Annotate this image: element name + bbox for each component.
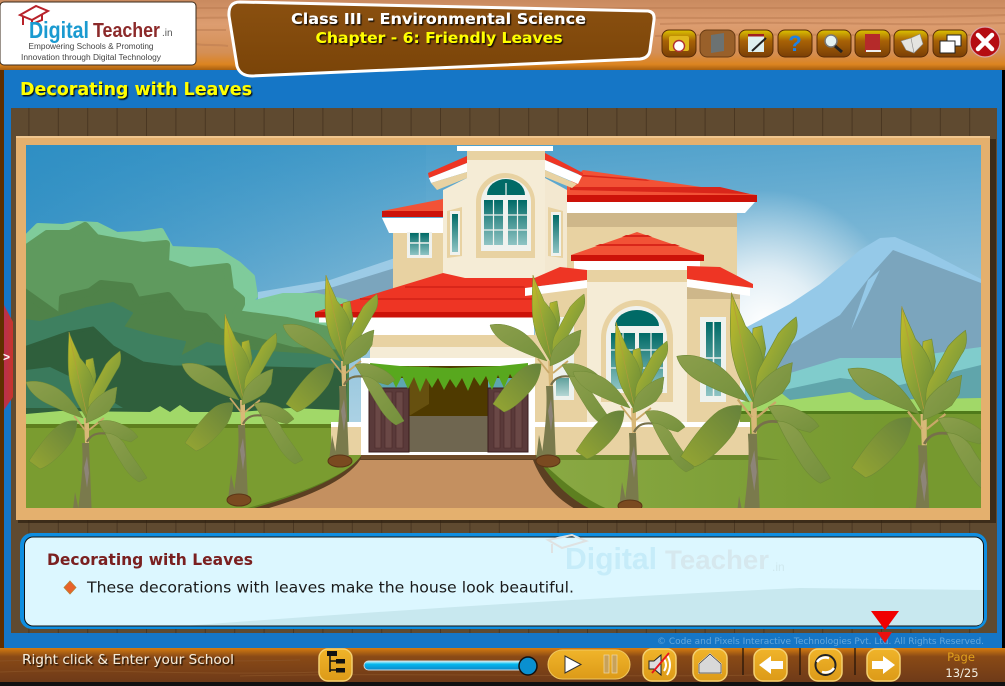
left lower wall: [331, 422, 363, 455]
wing side window left: [553, 317, 574, 400]
forest: dark canopy: [24, 284, 345, 420]
watermark: Teacher: [665, 545, 769, 575]
mountains right: [745, 237, 981, 420]
bottom wood control bar: [0, 648, 1005, 682]
watermark: .in: [772, 560, 785, 574]
logo wordmark: .in: [162, 28, 173, 39]
toolbar icons: [662, 27, 1000, 57]
course title: Class III - Environmental Science: [291, 10, 586, 28]
chapter title: Chapter - 6: Friendly Leaves: [316, 29, 562, 47]
tower roof right: [545, 153, 583, 188]
banana plant 4: [490, 275, 611, 467]
home button: [693, 649, 727, 681]
logo wordmark: [29, 17, 173, 43]
school prompt text: Right click & Enter your School: [22, 653, 234, 668]
left lawn: [26, 424, 366, 508]
page label: Page: [947, 650, 975, 664]
wing right roof: [687, 266, 753, 296]
right main wall: [565, 213, 737, 428]
icon: magnifier: [817, 30, 851, 57]
left side tab: >: [3, 350, 10, 364]
forest: low teal shrub: [26, 367, 123, 408]
garage opening: [361, 358, 535, 455]
slider knob: [519, 657, 537, 675]
banana plant 3: [283, 275, 404, 467]
icon: window resize: [933, 30, 967, 57]
icon: open book: [894, 30, 928, 57]
leaf garland: [370, 363, 528, 392]
left small roof: [382, 199, 443, 233]
logo tagline: Empowering Schools & Promoting: [28, 42, 154, 51]
picture frame: [16, 136, 996, 523]
back button: [754, 649, 787, 681]
arrow: red pointer to next: [871, 611, 899, 643]
sky: [26, 145, 981, 508]
icon: help: ?: [788, 31, 802, 56]
illustration: house scene: [26, 145, 981, 508]
title plaque: [229, 2, 654, 76]
banana plant 6: [677, 293, 830, 532]
watermark: [548, 535, 785, 576]
bottom black edge: [0, 682, 1005, 686]
plank wall panel: [11, 108, 997, 633]
logo icon: graduation cap: [20, 6, 48, 25]
logo tagline: [21, 42, 161, 62]
tower: [443, 146, 567, 278]
panel heading: Decorating with Leaves: [47, 550, 253, 569]
icon: dictionary: [855, 30, 890, 57]
forest: light canopy: [24, 224, 345, 420]
left side tab: [3, 305, 13, 410]
copyright: © Code and Pixels Interactive Technologies Pvt. Ltd. All Rights Reserved.: [657, 637, 984, 647]
tower roof left: [428, 156, 467, 190]
wing top roof: [571, 232, 704, 270]
distant mountains left: [258, 258, 395, 330]
logo wordmark: Teacher: [93, 20, 160, 42]
toolbar separators: [743, 648, 855, 675]
logo wordmark: Digital: [29, 17, 89, 43]
right main roof: [567, 170, 757, 213]
page heading: Decorating with Leaves: [20, 80, 252, 100]
house: [315, 146, 780, 460]
text panel: [20, 533, 987, 629]
driveway: [240, 455, 610, 510]
icon: close: [970, 27, 1000, 57]
progress slider: [364, 657, 537, 675]
top wood header bar: [0, 0, 1005, 70]
wing side window right: [700, 317, 726, 402]
page number: 13/25: [945, 666, 979, 680]
left small wall: [393, 232, 445, 292]
wing arched window: [601, 300, 673, 402]
tower side windows: [447, 207, 563, 258]
right side sections: [535, 287, 780, 460]
icon: schedule folder: [662, 30, 696, 57]
right-side bright grass: [740, 392, 981, 413]
forest: mid canopy: [24, 226, 345, 420]
banana plant 7: [848, 306, 999, 542]
small window: [407, 232, 432, 258]
banana plant 2: [182, 314, 303, 506]
left brown strip: [0, 70, 4, 648]
garage roof: [315, 273, 534, 335]
right door: [488, 388, 528, 452]
outline button: [319, 649, 352, 681]
panel lower shading: [190, 588, 983, 626]
wing body: [587, 270, 687, 422]
icon: help: [778, 30, 812, 57]
garage wing wall: [370, 335, 536, 363]
play pause control: [548, 650, 630, 679]
icon: notepad: [739, 30, 773, 57]
tower arched window: [476, 173, 535, 258]
forest: deep shade: [24, 328, 345, 420]
right lawn: [530, 411, 981, 508]
panel body text: These decorations with leaves make the house look beautiful.: [86, 578, 574, 596]
logo tagline: Innovation through Digital Technology: [21, 53, 161, 62]
banana plant 5: [573, 322, 694, 512]
wing left roof: [523, 267, 587, 296]
watermark: Digital: [565, 541, 657, 576]
icon: reference book: [700, 30, 735, 57]
left door: [369, 388, 409, 452]
bright grass strip: [26, 405, 340, 426]
banana plant 1: [26, 332, 147, 520]
next button: [867, 649, 900, 681]
forest: teal foliage: [24, 303, 345, 420]
sound button: [643, 649, 676, 681]
logo card: [0, 2, 196, 65]
bullet icon: [64, 581, 76, 594]
refresh button: [809, 649, 842, 681]
